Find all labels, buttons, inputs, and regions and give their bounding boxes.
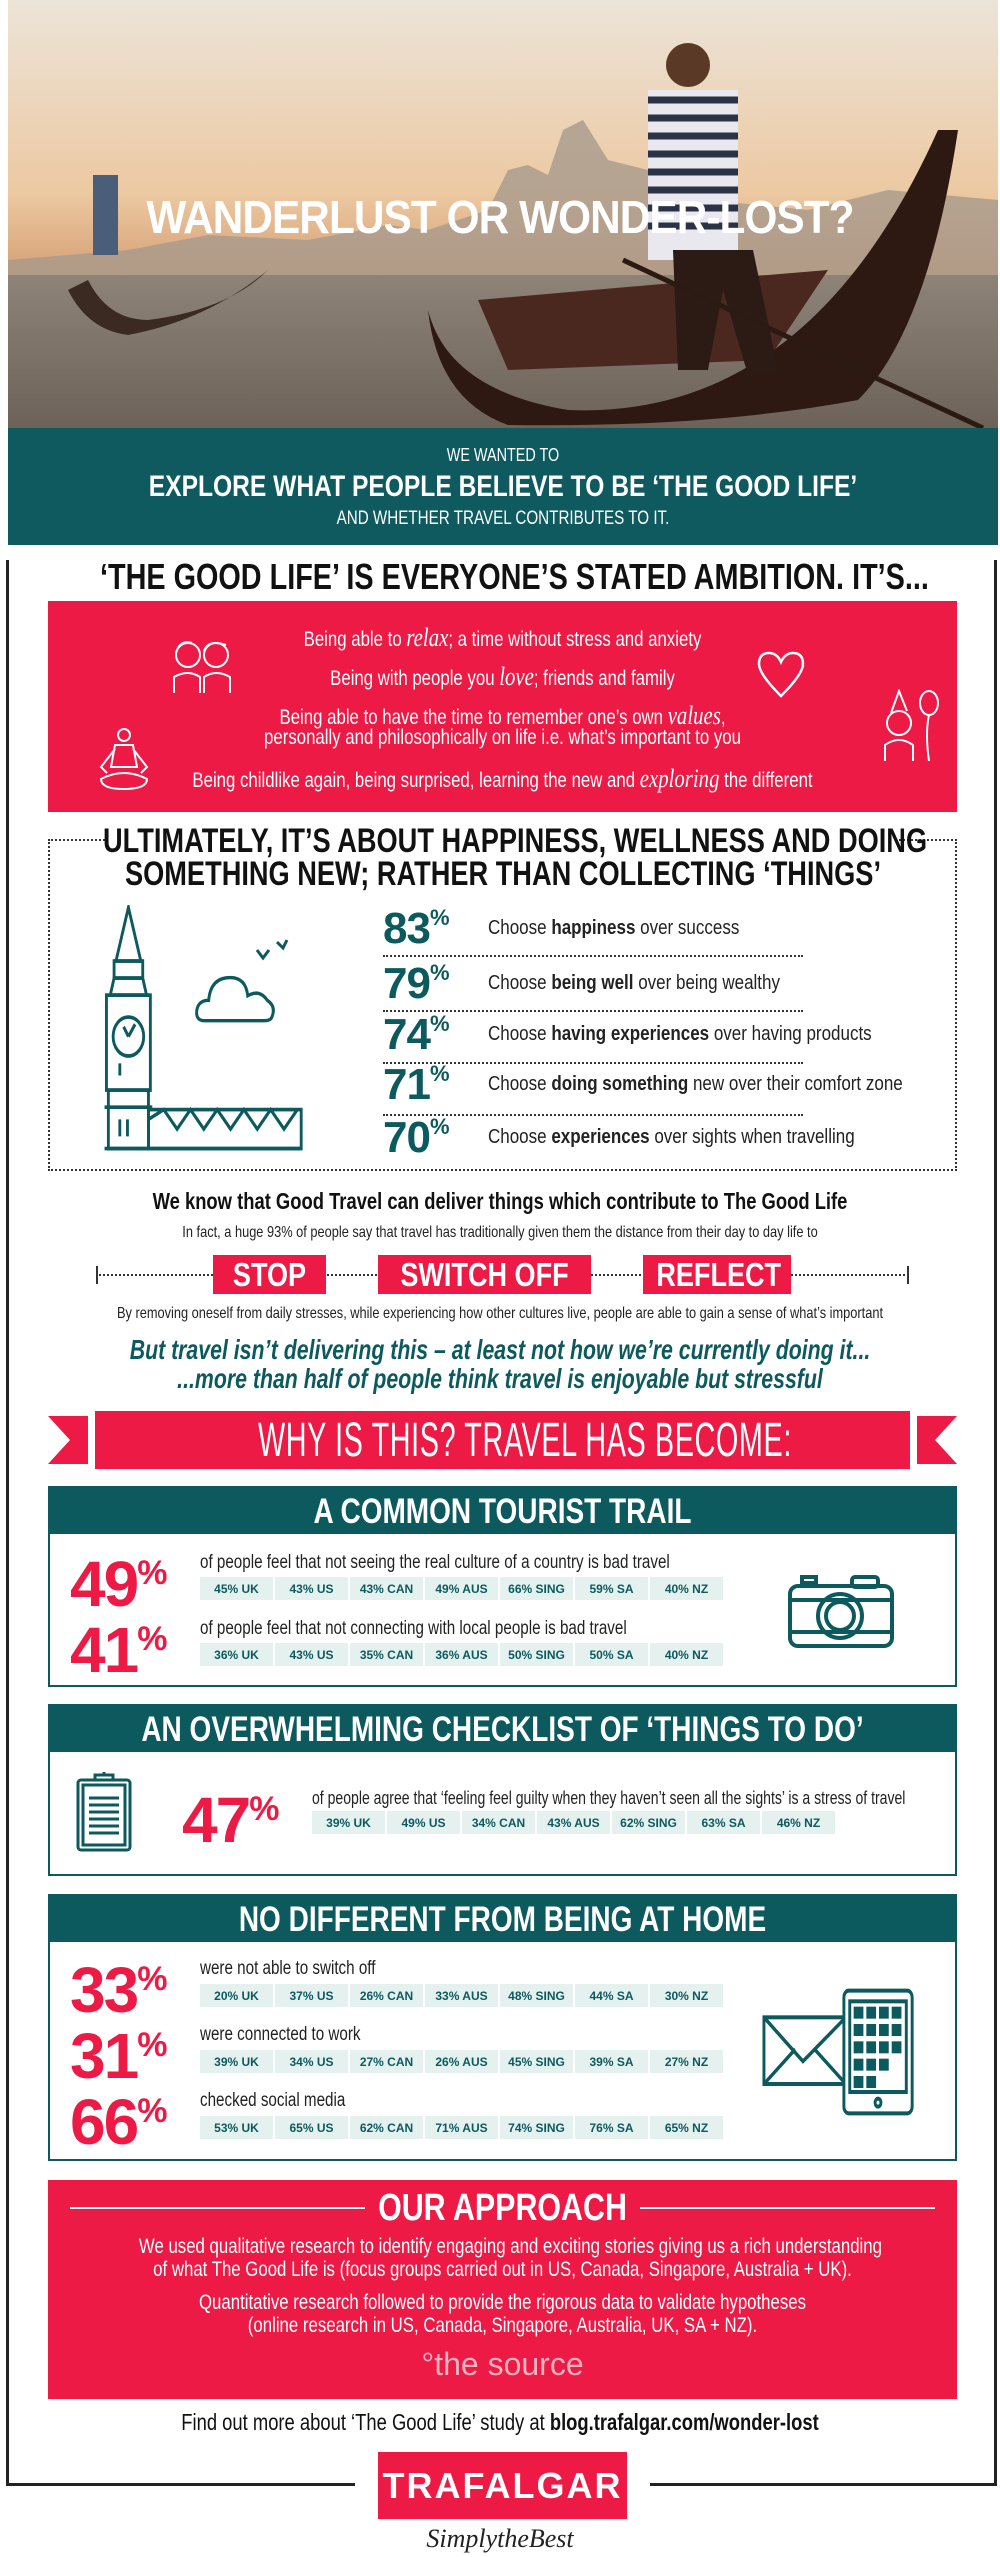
text: teal italic callout: ...more than half of people think travel is enjoyable but stressful	[177, 1363, 823, 1394]
ribbon banner: WHY IS THIS? TRAVEL HAS BECOME:	[258, 1414, 792, 1467]
icon: couple	[173, 641, 231, 693]
stat 49%	[70, 1548, 723, 1620]
stat 66%	[70, 2086, 723, 2158]
stat 49%: 45% UK	[214, 1582, 259, 1596]
header: AN OVERWHELMING CHECKLIST OF ‘THINGS TO DO’	[141, 1710, 864, 1749]
icon: envelope and phone	[762, 1988, 914, 2116]
stat 49%: of people feel that not seeing the real culture of a country is bad travel	[200, 1552, 670, 1573]
stat rows: Choose being well over being wealthy	[488, 972, 780, 994]
stat 49%: 59% SA	[589, 1582, 634, 1596]
stat 31%: 45% SING	[508, 2054, 565, 2068]
tag: stop	[213, 1255, 326, 1294]
stat 49%: 49% AUS	[435, 1582, 488, 1596]
icon: camera	[788, 1575, 894, 1648]
teal intro band: WE WANTED TO	[447, 445, 559, 465]
heading: our approach: OUR APPROACH	[378, 2187, 627, 2229]
stat 66%: 66%	[70, 2086, 167, 2158]
tag: stop: STOP	[233, 1256, 306, 1293]
stat 47%: 47%	[182, 1784, 279, 1856]
logo: trafalgar: TRAFALGAR	[382, 2465, 622, 2506]
stat rows: 79%	[383, 959, 450, 1008]
hero photo	[8, 0, 998, 428]
stat 47%: 62% SING	[620, 1816, 677, 1830]
text block: good life list: Being able to have the time to remember one’s own values,	[280, 701, 726, 730]
text: 93%: In fact, a huge 93% of people say that travel has traditionally given them the distance from their day to day life to	[182, 1224, 818, 1241]
text block: good life list: Being able to relax; a time without stress and anxiety	[304, 623, 701, 652]
stat 41%: 50% SING	[508, 1648, 565, 1662]
section: common tourist trail	[48, 1486, 957, 1687]
icon: big ben	[104, 905, 303, 1150]
stat 31%: 34% US	[289, 2054, 334, 2068]
panel: our approach: Quantitative research followed to provide the rigorous data to validate hypotheses	[199, 2291, 806, 2314]
stat 49%: 43% US	[289, 1582, 334, 1596]
stat 33%: 33%	[70, 1954, 167, 2026]
text block: good life list	[192, 623, 813, 793]
stat rows: Choose having experiences over having products	[488, 1023, 872, 1045]
stat 49%: 49%	[70, 1548, 167, 1620]
teal intro band: AND WHETHER TRAVEL CONTRIBUTES TO IT.	[337, 508, 669, 529]
stat 49%: 40% NZ	[665, 1582, 708, 1596]
title: WANDERLUST OR WONDER-LOST?	[146, 191, 854, 243]
stat 47%: 63% SA	[701, 1816, 746, 1830]
header: A COMMON TOURIST TRAIL	[314, 1492, 691, 1531]
text: teal italic callout: But travel isn’t delivering this – at least not how we’re currently doing it...	[130, 1334, 870, 1365]
stat 33%: 30% NZ	[665, 1988, 708, 2002]
section: overwhelming checklist	[48, 1704, 957, 1876]
stat 66%: 74% SING	[508, 2120, 565, 2134]
stat 47%: 49% US	[401, 1816, 446, 1830]
stat 66%: 65% US	[289, 2120, 334, 2134]
stat 33%: 33% AUS	[435, 1988, 488, 2002]
stat 47%: 39% UK	[326, 1816, 371, 1830]
stat 41%: 36% UK	[214, 1648, 259, 1662]
stat 33%: were not able to switch off	[200, 1958, 375, 1979]
heading: happiness	[106, 825, 899, 893]
text: approach: of what The Good Life is (focus groups carried out in US, Canada, Singapore, Australia + UK).	[153, 2258, 852, 2281]
stat rows: 83%	[383, 904, 450, 953]
stat 41%: 40% NZ	[665, 1648, 708, 1662]
stat 33%: 48% SING	[508, 1988, 565, 2002]
logo: the source: °the source	[421, 2346, 584, 2382]
header	[50, 1896, 955, 1942]
tag: reflect: REFLECT	[656, 1256, 781, 1293]
stat rows: Choose experiences over sights when travelling	[488, 1126, 855, 1148]
stat 31%: 39% SA	[589, 2054, 634, 2068]
tagline: SimplytheBest	[426, 2524, 574, 2553]
icon: cloud	[195, 976, 275, 1022]
stat 33%: 44% SA	[589, 1988, 634, 2002]
stat 47%	[182, 1784, 905, 1856]
stat 66%: checked social media	[200, 2090, 345, 2111]
stat 41%: of people feel that not connecting with local people is bad travel	[200, 1618, 627, 1639]
stat 33%: 37% US	[289, 1988, 334, 2002]
teal intro band: EXPLORE WHAT PEOPLE BELIEVE TO BE ‘THE GOOD LIFE’	[149, 470, 857, 503]
stat 47%: 46% NZ	[777, 1816, 820, 1830]
text block: good life list: personally and philosophically on life i.e. what’s important to you	[264, 726, 741, 749]
stat 31%: were connected to work	[200, 2024, 361, 2045]
icon: birthday boy	[884, 689, 939, 761]
stat 41%: 35% CAN	[360, 1648, 413, 1662]
tag: switch off: SWITCH OFF	[400, 1256, 569, 1293]
stat 31%: 27% NZ	[665, 2054, 708, 2068]
icon: clipboard	[76, 1772, 132, 1852]
stat 66%: 71% AUS	[435, 2120, 488, 2134]
stat 31%: 39% UK	[214, 2054, 259, 2068]
stat rows: 71%	[383, 1060, 450, 1109]
stat 66%: 53% UK	[214, 2120, 259, 2134]
stat rows: Choose doing something new over their comfort zone	[488, 1073, 903, 1095]
stat 31%: 31%	[70, 2020, 167, 2092]
stat 47%: of people agree that ‘feeling feel guilty when they haven’t seen all the sights’ is a stress of travel	[312, 1788, 905, 1808]
stat rows: 70%	[383, 1113, 450, 1162]
section: no different from home	[48, 1894, 957, 2161]
stat 41%	[70, 1614, 723, 1686]
stat 66%: 76% SA	[589, 2120, 634, 2134]
ribbon banner	[48, 1411, 957, 1469]
heading: happiness: SOMETHING NEW; RATHER THAN COLLECTING ‘THINGS’	[124, 855, 881, 893]
text block: good life list: Being with people you love; friends and family	[330, 662, 675, 691]
header: NO DIFFERENT FROM BEING AT HOME	[239, 1900, 766, 1939]
text: teal italic callout	[130, 1334, 870, 1394]
heading: good life: ‘THE GOOD LIFE’ IS EVERYONE’S STATED AMBITION. IT’S...	[100, 556, 929, 597]
panel: our approach	[48, 2180, 957, 2399]
stat 66%: 62% CAN	[360, 2120, 413, 2134]
stat 31%	[70, 2020, 723, 2092]
text: removing oneself: By removing oneself from daily stresses, while experiencing how other cultures live, people are able to gain a sense of what’s important	[117, 1305, 883, 1322]
stat 33%: 26% CAN	[360, 1988, 413, 2002]
stat 41%: 43% US	[289, 1648, 334, 1662]
stat 49%: 66% SING	[508, 1582, 565, 1596]
stat 31%: 26% AUS	[435, 2054, 488, 2068]
panel: good life	[48, 601, 957, 812]
icon: birds	[256, 939, 288, 960]
text block: good life list: Being childlike again, being surprised, learning the new and exploring the different	[192, 764, 813, 793]
icon: heart	[758, 652, 804, 698]
panel: happiness stats	[48, 839, 957, 1171]
icon: yoga	[100, 728, 148, 790]
text: find out more: Find out more about ‘The Good Life’ study at blog.trafalgar.com/wonder-lost	[181, 2409, 819, 2435]
stat 31%: 27% CAN	[360, 2054, 413, 2068]
teal intro band	[8, 428, 998, 545]
header	[50, 1488, 955, 1534]
stat 41%: 50% SA	[589, 1648, 634, 1662]
text: good travel: We know that Good Travel can deliver things which contribute to The Good Life	[153, 1188, 847, 1214]
stat 33%: 20% UK	[214, 1988, 259, 2002]
stat 41%: 41%	[70, 1614, 167, 1686]
text: approach	[139, 2235, 882, 2281]
stat 33%	[70, 1954, 723, 2026]
stat rows: Choose happiness over success	[488, 917, 739, 939]
text: approach: We used qualitative research to identify engaging and exciting stories giving us a rich understanding	[139, 2235, 882, 2258]
stat 66%: 65% NZ	[665, 2120, 708, 2134]
stat rows: 74%	[383, 1010, 450, 1059]
stat rows	[383, 904, 903, 1162]
panel: our approach: (online research in US, Canada, Singapore, Australia, UK, SA + NZ).	[248, 2314, 757, 2337]
stat 49%: 43% CAN	[360, 1582, 413, 1596]
stat 47%: 34% CAN	[472, 1816, 525, 1830]
logo: trafalgar	[378, 2452, 627, 2519]
stat 41%: 36% AUS	[435, 1648, 488, 1662]
header	[50, 1706, 955, 1752]
frame	[6, 560, 9, 2486]
heading: happiness: ULTIMATELY, IT’S ABOUT HAPPINESS, WELLNESS AND DOING	[102, 822, 927, 860]
stat 47%: 43% AUS	[547, 1816, 600, 1830]
stop switch off reflect row	[96, 1255, 909, 1294]
